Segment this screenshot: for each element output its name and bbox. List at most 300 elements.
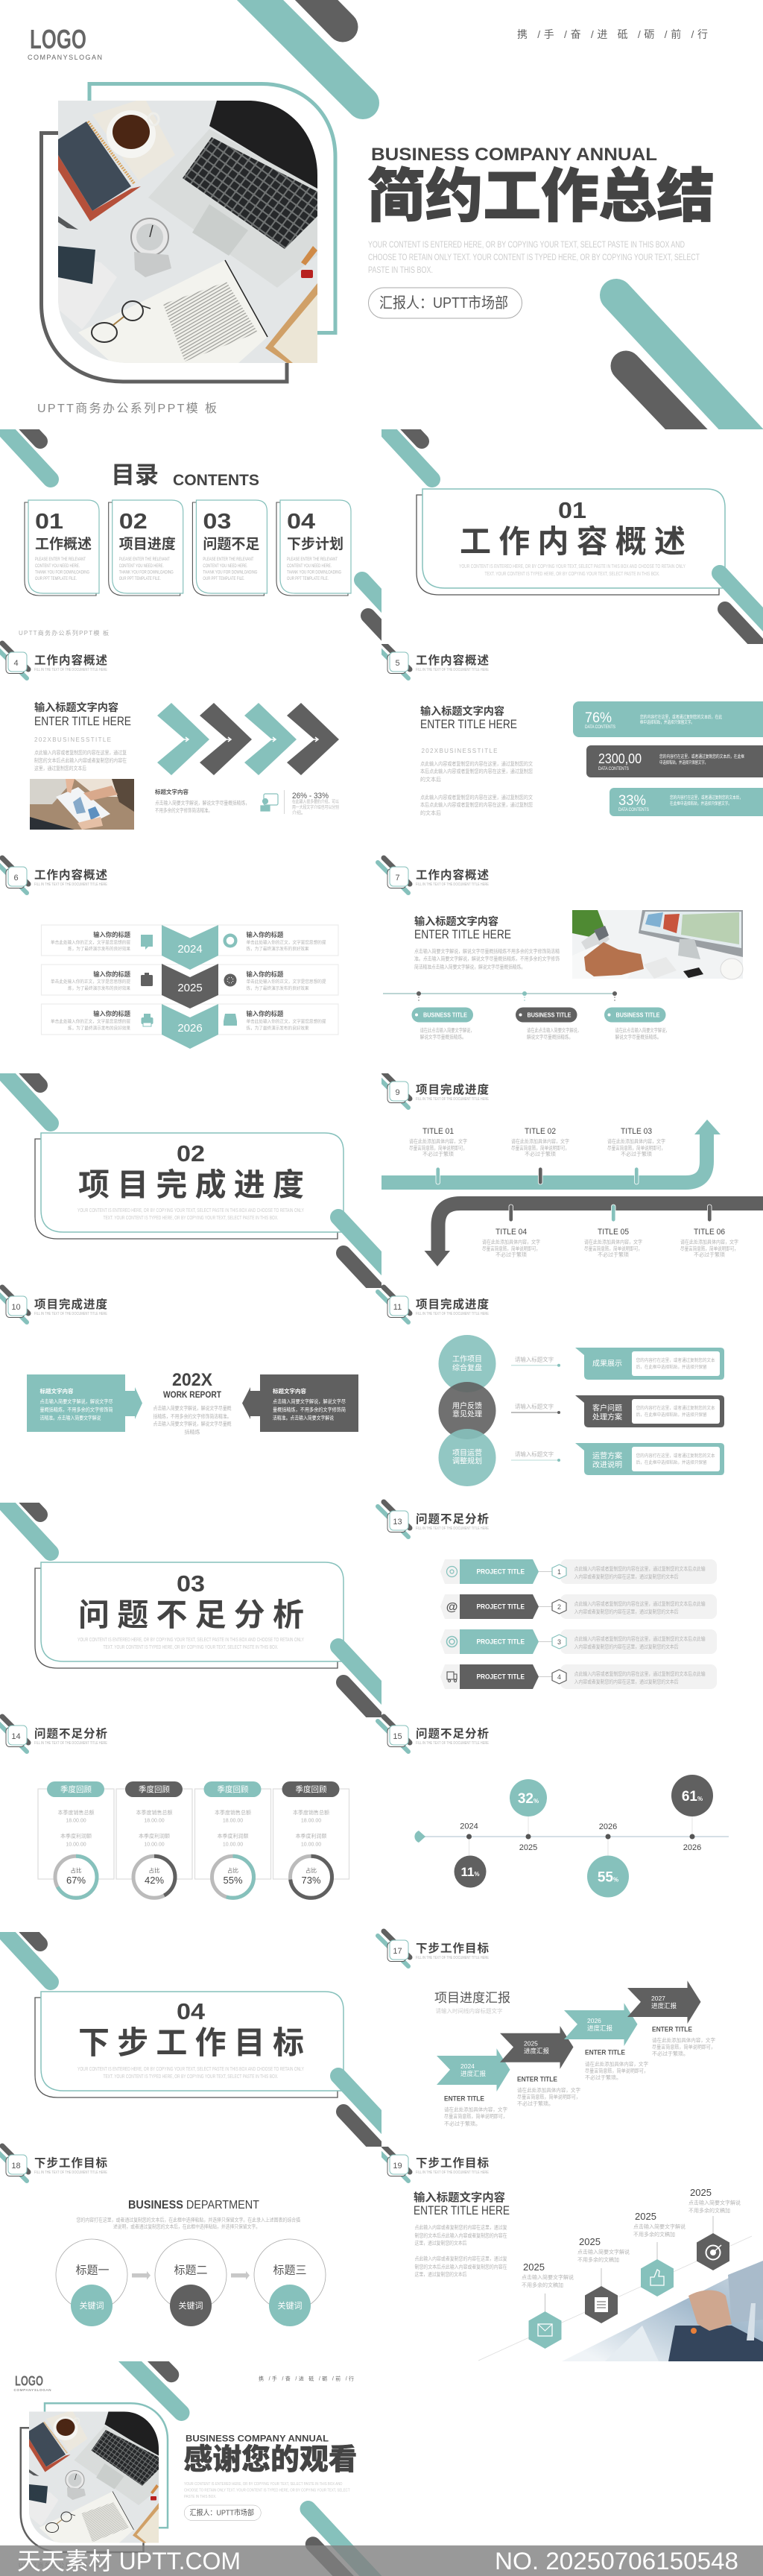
tech photo — [562, 2261, 763, 2361]
data card 76% — [573, 701, 763, 737]
section number: 04 — [177, 1998, 206, 2024]
quarter card 1: 占比 — [70, 1866, 82, 1874]
row text left — [51, 931, 131, 1032]
icon: suitcase — [141, 973, 153, 986]
year labels — [460, 1822, 701, 1852]
contents card 01 — [25, 500, 99, 596]
stair arrow 2025: 尽量言简意赅，简单说明即可， — [517, 2093, 580, 2100]
quarter card 3: 季度回顾 — [218, 1784, 249, 1794]
step 3: 2025 — [635, 2211, 656, 2222]
heading text: 点此输入内容或者复制您的内容在这里，通过复制您的文 — [420, 760, 533, 767]
heading text: 这里，通过复制您的文本后 — [414, 2239, 466, 2247]
band 2026 — [162, 1004, 218, 1049]
slide 9: road arrows — [378, 1073, 763, 1266]
contents card 04 — [276, 500, 351, 596]
slide 10: work report — [0, 1287, 358, 1436]
project row 2: 入内容或者复制您的内容在这里，通过复制您的文本后 — [574, 1609, 679, 1614]
stair arrow 2026: 不必过于繁琐。 — [585, 2074, 621, 2081]
title 04: 请在此处添加具体内容，文字 — [482, 1239, 540, 1245]
row text left: 输入你的标题 — [93, 931, 131, 938]
header title — [416, 1726, 490, 1746]
quarter card 4: 季度回顾 — [295, 1784, 327, 1794]
heading text: 202XBUSINESSTITLE — [34, 736, 111, 743]
slide 15: bubble timeline — [378, 1717, 729, 1898]
project row 3: 3 — [557, 1638, 561, 1646]
header title: FILL IN THE TEXT OF THE DOCUMENT TITLE HERE — [416, 1097, 490, 1102]
section number: 01 — [558, 497, 586, 523]
center report text: 点击输入简要文字解说，解说文字尽量概 — [153, 1421, 231, 1427]
step 2 — [577, 2236, 630, 2323]
project row 3: 点此输入内容或者复制您的内容在这里，通过复制您的文本后点此输 — [574, 1635, 706, 1642]
result card 1: 您的内容打在这里，或者通过复制您的文本 — [636, 1357, 715, 1363]
circle: 标题三 — [254, 2239, 326, 2326]
title 03 — [607, 1127, 665, 1157]
slide 19: hexagon steps — [378, 2146, 763, 2361]
quarter card 3: 本季度利润额 — [218, 1832, 249, 1840]
chevron 1 — [157, 703, 209, 775]
contents card 03: 问题不足 — [203, 536, 259, 552]
pill 2: 请在此点击输入简要文字解说， — [527, 1027, 581, 1033]
stair arrow 2026: ENTER TITLE — [585, 2048, 625, 2057]
circle: 标题一: 关键词 — [79, 2300, 104, 2311]
icon: presenter — [261, 794, 278, 811]
slide 6: year rows — [0, 858, 338, 1049]
contents card 03: 03 — [203, 510, 231, 534]
slide 11: overlapping circles — [378, 1287, 724, 1486]
header title: FILL IN THE TEXT OF THE DOCUMENT TITLE HERE — [416, 883, 490, 887]
step 2: 点击输入简要文字解说 — [577, 2248, 630, 2255]
stair arrow 2024 — [437, 2048, 510, 2127]
left arrow card: 量概括精炼，不用多余的文字修饰简 — [40, 1406, 113, 1413]
circle 1 — [438, 1335, 496, 1392]
project row 4 — [440, 1664, 717, 1689]
center report text: 括精炼，不用多余的文字修饰简洁精准。 — [153, 1413, 231, 1419]
heading text: ENTER TITLE HERE — [420, 718, 517, 731]
year labels: 2026 — [599, 1822, 617, 1831]
header title: 问题不足分析 — [416, 1512, 489, 1526]
circle: 标题一: 标题一 — [75, 2264, 110, 2276]
title 05: 请在此处添加具体内容，文字 — [584, 1239, 642, 1245]
heading text: 本后点此输入内容或者复制您的内容在这里，通过复制您 — [420, 801, 533, 808]
data card 2300,00 — [586, 745, 763, 777]
year labels: 2025 — [519, 1843, 537, 1852]
title 02: 尽量言简意赅，简单说明即可， — [511, 1145, 569, 1151]
result card 3: 后，在此框中选择粘贴，并选择只保留 — [636, 1459, 707, 1465]
header title — [34, 868, 108, 887]
contents card 03 — [192, 500, 267, 596]
page number: 9 — [395, 1088, 400, 1097]
bubble 61% — [671, 1775, 713, 1816]
stair arrow 2027: ENTER TITLE — [652, 2026, 692, 2033]
department heading — [76, 2199, 300, 2230]
quarter card 4: 本季度利润额 — [295, 1832, 326, 1840]
header title: 工作内容概述 — [416, 868, 489, 882]
row text left: 炼，为了最终演示发布的良好效果 — [68, 946, 130, 952]
header title — [34, 653, 108, 672]
chevron 4 — [287, 703, 339, 775]
title 01: 请在此处添加具体内容，文字 — [409, 1137, 467, 1145]
data card 76%: DATA CONTENTS — [585, 725, 615, 730]
header title: 工作内容概述 — [34, 868, 107, 882]
heading text: ENTER TITLE HERE — [34, 715, 131, 728]
step 1: 点击输入简要文字解说 — [522, 2273, 574, 2281]
circle 2: 用户反馈 — [452, 1401, 482, 1410]
right arrow card: 标题文字内容 — [273, 1387, 306, 1395]
circle 1: 工作项目 — [452, 1355, 482, 1364]
row text right: 单击此处输入你的正文，文字是您思想的提 — [246, 1018, 326, 1024]
row text right: 单击此处输入你的正文，文字是您思想的提 — [246, 979, 326, 985]
heading text: 输入标题文字内容 — [34, 701, 118, 713]
row text left: 炼，为了最终演示发布的良好效果 — [68, 985, 130, 991]
circle 2 — [438, 1382, 496, 1439]
data card 33%: 33% — [618, 793, 646, 809]
title 03: 请在此处添加具体内容，文字 — [607, 1137, 665, 1145]
bubble 55% — [587, 1856, 629, 1898]
row text left: 单击此处输入你的正文，文字是您思想的提 — [51, 1018, 130, 1024]
circle 1: 综合复盘 — [452, 1363, 482, 1373]
heading text: 的文本后 — [420, 809, 441, 816]
header title — [416, 1512, 490, 1531]
report heading — [434, 1991, 510, 2014]
page number: 15 — [393, 1732, 402, 1741]
row text right: 输入你的标题 — [246, 1010, 284, 1017]
heading text: 输入标题文字内容 — [414, 2191, 505, 2204]
header title: 下步工作目标 — [416, 1941, 489, 1955]
quarter card 2: 42% — [145, 1875, 164, 1886]
watermark band: NO. 20250706150548 — [495, 2548, 738, 2575]
quarter card 2: 10.00.00 — [144, 1843, 165, 1847]
title 05: 尽量言简意赅，简单说明即可， — [584, 1245, 642, 1252]
header title: 下步工作目标 — [34, 2156, 107, 2170]
section title: 项目完成进度 — [78, 1167, 304, 1202]
project row 3: PROJECT TITLE — [477, 1638, 525, 1646]
step 4 — [688, 2187, 741, 2270]
pill 3: 请在此点击输入简要文字解说， — [615, 1027, 669, 1033]
step 4: 点击输入简要文字解说 — [688, 2199, 741, 2206]
result card 1: 成果展示 — [592, 1360, 622, 1368]
right arrow card: 量概括精炼，不用多余的文字修饰简 — [273, 1406, 346, 1413]
heading text: 点击输入简要文字解说，解说文字尽量概括精炼不用多余的文字修饰简洁精 — [414, 948, 560, 954]
heading text: 这里，通过复制您的文本后 — [414, 2270, 466, 2278]
slide 16: section 04 — [0, 1919, 402, 2159]
title 01: 不必过于繁琐 — [422, 1151, 454, 1157]
step 4: 不用多余的文稿加 — [688, 2207, 730, 2214]
step 4: 2025 — [690, 2187, 712, 2198]
page number: 7 — [395, 874, 400, 883]
stair arrow 2027 — [627, 1980, 715, 2057]
connectors: 请输入标题文字 — [515, 1450, 554, 1458]
data card 76%: 框中选择粘贴，并选择只保留文字。 — [640, 719, 694, 725]
page number: 13 — [393, 1518, 402, 1527]
header title — [416, 1941, 490, 1960]
stair arrow 2024: 不必过于繁琐。 — [444, 2120, 481, 2127]
band 2025 — [162, 964, 218, 1008]
contents card 01: 01 — [35, 510, 63, 534]
pill 1: 解说文字尽量概括精炼。 — [420, 1033, 466, 1041]
title 02: 不必过于繁琐 — [525, 1151, 556, 1157]
quarter card 1: 18.00.00 — [66, 1819, 86, 1823]
row text left: 炼，为了最终演示发布的良好效果 — [68, 1026, 130, 1032]
icon: inbox — [224, 1014, 237, 1026]
title 05: 不必过于繁琐 — [598, 1251, 629, 1258]
quarter card 3: 占比 — [227, 1866, 238, 1874]
step 2: 2025 — [579, 2236, 601, 2247]
quarter card 1: 本季度利润额 — [60, 1832, 92, 1840]
stair arrow 2026: 2026 — [587, 2017, 601, 2024]
row text left: 输入你的标题 — [93, 970, 131, 978]
pill 1 — [411, 1008, 475, 1041]
stair arrow 2025: ENTER TITLE — [517, 2075, 557, 2084]
contents heading: 目录 — [111, 461, 159, 488]
stat text: 介绍。 — [292, 809, 305, 815]
slide 7: photo and timeline — [378, 858, 743, 1041]
title 06: 不必过于繁琐 — [694, 1251, 725, 1258]
quarter card 4: 10.00.00 — [301, 1843, 321, 1847]
center report text — [153, 1370, 231, 1436]
section title: 问题不足分析 — [78, 1597, 304, 1632]
caption text — [155, 788, 250, 814]
heading text: ENTER TITLE HERE — [414, 2204, 510, 2217]
section number: 02 — [177, 1140, 205, 1167]
page number: 11 — [393, 1303, 402, 1312]
page number: 14 — [11, 1732, 21, 1741]
bubble 55%: 55% — [598, 1869, 618, 1886]
row text right: 炼，为了最终演示发布的良好效果 — [246, 1026, 308, 1032]
department heading: 您的内容打在这里，或者通过复制您的文本后，在此框中选择粘贴，并选择只保留文字。在此录入上述图表的综合描 — [76, 2217, 300, 2223]
stair arrow 2024: 尽量言简意赅，简单说明即可， — [444, 2112, 507, 2120]
slide 13: project rows — [378, 1502, 717, 1689]
bubble 32%: 32% — [518, 1791, 539, 1807]
title 01 — [409, 1127, 467, 1157]
band 2024 — [162, 925, 218, 970]
slide 8: section 02 — [0, 1061, 402, 1300]
title 05 — [584, 1228, 642, 1258]
icon: gear — [224, 974, 236, 986]
pill 2: BUSINESS TITLE — [528, 1012, 572, 1018]
header title: 工作内容概述 — [416, 653, 489, 667]
section title: 下步工作目标 — [78, 2025, 304, 2060]
header title — [34, 1726, 108, 1746]
heading text: 点此输入内容或者复制您的内容在这里，通过复 — [414, 2224, 507, 2230]
row text left: 输入你的标题 — [93, 1010, 131, 1017]
result card 3: 运营方案 — [592, 1450, 622, 1461]
title 03: 不必过于繁琐 — [621, 1151, 652, 1157]
project row 4: PROJECT TITLE — [477, 1673, 525, 1680]
center report text: 括精炼 — [185, 1428, 200, 1436]
stair arrow 2025: 不必过于繁琐。 — [517, 2100, 554, 2106]
row text left: 单击此处输入你的正文，文字是您思想的提 — [51, 939, 130, 945]
slide 14: quarterly cards — [0, 1717, 349, 1898]
header title: FILL IN THE TEXT OF THE DOCUMENT TITLE HERE — [416, 1312, 490, 1316]
project row 2 — [440, 1594, 717, 1619]
timeline — [383, 991, 617, 1003]
stair arrow 2025 — [500, 2026, 580, 2106]
heading text: 制您的文本后点此输入内容或者复制您的内容在 — [414, 2232, 507, 2239]
result card 2: 客户问题 — [592, 1403, 622, 1413]
project row 1: 1 — [557, 1568, 561, 1576]
year labels: 2026 — [683, 1843, 701, 1852]
circle: 标题一 — [56, 2239, 127, 2326]
contents card 04: 04 — [287, 510, 315, 534]
center report text: 点击输入简要文字解说，解说文字尽量概 — [153, 1404, 231, 1412]
quarter card 2: 本季度利润额 — [139, 1832, 170, 1840]
step 3 — [633, 2211, 686, 2296]
caption text: 不用多余的文字修饰简洁精准。 — [155, 806, 212, 814]
slide 2: contents — [0, 429, 382, 641]
pill 3: 解说文字尽量概括精炼。 — [615, 1033, 662, 1041]
arrow 2 — [231, 2271, 250, 2279]
result card 2: 您的内容打在这里，或者通过复制您的文本 — [636, 1405, 715, 1411]
stair arrow 2025: 进度汇报 — [524, 2048, 550, 2055]
page number: 17 — [393, 1947, 402, 1956]
teal road arrow — [382, 1120, 721, 1182]
heading text: 点此输入内容或者复制您的内容在这里，通过复制您的文 — [420, 794, 533, 801]
step 2: 不用多余的文稿加 — [577, 2256, 619, 2263]
row text right: 输入你的标题 — [246, 970, 284, 978]
office photo — [572, 910, 743, 979]
pill 3: BUSINESS TITLE — [615, 1012, 660, 1018]
slide 1: cover — [28, 0, 763, 458]
contents card 01: 工作概述 — [35, 536, 92, 552]
quarter card 1: 67% — [66, 1875, 86, 1886]
quarter card 3 — [195, 1781, 271, 1898]
quarter card 2 — [116, 1781, 192, 1898]
header title: FILL IN THE TEXT OF THE DOCUMENT TITLE HERE — [416, 1741, 490, 1746]
header title — [34, 1297, 108, 1316]
title 02 — [511, 1127, 569, 1157]
quarter card 3: 本季度销售总额 — [215, 1809, 251, 1816]
title 06: 尽量言简意赅，简单说明即可， — [680, 1245, 738, 1252]
stat text: 在此输入很多要的介绍，可以 — [292, 799, 339, 805]
header title: FILL IN THE TEXT OF THE DOCUMENT TITLE HERE — [416, 668, 490, 672]
project row 2: 2 — [557, 1603, 561, 1611]
header title: FILL IN THE TEXT OF THE DOCUMENT TITLE HERE — [34, 1312, 108, 1316]
project row 3: 入内容或者复制您的内容在这里，通过复制您的文本后 — [574, 1643, 679, 1650]
quarter card 2: 18.00.00 — [144, 1819, 165, 1823]
circle 2: 意见处理 — [452, 1409, 482, 1419]
icon: lifebuoy — [224, 934, 237, 947]
header title: FILL IN THE TEXT OF THE DOCUMENT TITLE HERE — [34, 668, 108, 672]
caption text: 点击输入简要文字解说，解说文字尽量概括精炼， — [155, 799, 250, 806]
heading text: 点此输入内容或者复制您的内容在这里，通过复 — [34, 749, 127, 756]
quarter card 4 — [273, 1781, 349, 1898]
data card 76%: 76% — [585, 710, 612, 726]
section number: 03 — [177, 1570, 205, 1597]
slide 5: data cards — [378, 643, 763, 816]
contents card 04: 下步计划 — [287, 536, 343, 552]
band 2025: 2025 — [177, 982, 203, 994]
data card 2300,00: 2300,00 — [598, 751, 642, 766]
stat text: 用一大段文字介绍也可以分别 — [292, 804, 339, 810]
quarter card 1 — [38, 1781, 114, 1898]
stair arrow 2024: 2024 — [460, 2062, 475, 2070]
result card 3: 您的内容打在这里，或者通过复制您的文本 — [636, 1453, 715, 1459]
title 04: 不必过于繁琐 — [496, 1251, 527, 1258]
stair arrow 2026: 请在此处添加具体内容，文字 — [585, 2060, 648, 2068]
section title: 工作内容概述 — [460, 524, 686, 559]
right arrow card — [242, 1374, 358, 1432]
slide 18: business department — [0, 2146, 326, 2326]
header title: 项目完成进度 — [416, 1082, 489, 1096]
heading text: 准。点击输入简要文字解说，解说文字尽量概括精炼，不用多余的文字修饰 — [414, 956, 560, 962]
title 03: 尽量言简意赅，简单说明即可， — [607, 1145, 665, 1151]
slide 4: chevrons — [0, 643, 339, 830]
heading text: 简洁精准点击输入简要文字解说，解说文字尽量概括精炼。 — [414, 963, 525, 970]
pill 1: BUSINESS TITLE — [423, 1012, 468, 1018]
quarter card 2: 本季度销售总额 — [136, 1809, 173, 1816]
row boxes — [42, 925, 338, 1035]
step 3: 不用多余的文稿加 — [633, 2231, 675, 2238]
quarter card 3: 18.00.00 — [223, 1819, 243, 1823]
project row 2: @ — [446, 1601, 458, 1614]
title 06: 请在此处添加具体内容，文字 — [680, 1239, 738, 1245]
chevron 3 — [244, 703, 297, 775]
row text right: 单击此处输入你的正文，文字是您思想的提 — [246, 939, 326, 945]
connectors — [511, 1355, 560, 1462]
stair arrow 2027: 2027 — [651, 1995, 665, 2002]
header title — [416, 868, 490, 887]
step 1: 2025 — [523, 2261, 545, 2273]
data card 33% — [610, 788, 763, 816]
page number: 18 — [11, 2162, 21, 2171]
pill 3 — [604, 1008, 669, 1041]
quarter card 4: 18.00.00 — [301, 1819, 321, 1823]
title 04 — [482, 1228, 540, 1258]
header title: 问题不足分析 — [34, 1726, 107, 1740]
quarter card 2: 季度回顾 — [139, 1784, 170, 1794]
heading text — [34, 701, 131, 771]
heading text: 的文本后 — [420, 776, 441, 783]
heading text: 输入标题文字内容 — [420, 705, 504, 717]
stair arrow 2024: 请在此处添加具体内容，文字 — [444, 2106, 507, 2112]
watermark band: 天天素材 UPTT.COM — [17, 2548, 241, 2575]
icon: printer — [142, 1014, 153, 1026]
contents card 02 — [109, 500, 183, 596]
band 2024: 2024 — [177, 943, 203, 956]
data card 76%: 您的内容打在这里，或者通过复制您的文本后，在此 — [640, 714, 722, 720]
stair arrow 2026: 尽量言简意赅，简单说明即可， — [585, 2068, 648, 2074]
circle 3: 项目运营 — [452, 1448, 482, 1458]
stair arrow 2024: ENTER TITLE — [444, 2094, 484, 2103]
slide 20: thank you cover — [13, 2343, 384, 2576]
stair arrow 2027: 尽量言简意赅，简单说明即可， — [652, 2044, 715, 2050]
year labels: 2024 — [460, 1822, 478, 1831]
left arrow card — [27, 1374, 142, 1432]
quarter card 4: 73% — [301, 1875, 321, 1886]
connectors: 请输入标题文字 — [515, 1403, 554, 1410]
quarter card 1: 本季度销售总额 — [58, 1809, 94, 1816]
stair arrow 2027: 请在此处添加具体内容，文字 — [652, 2036, 715, 2044]
data card 2300,00: DATA CONTENTS — [598, 767, 629, 771]
title 06: TITLE 06 — [694, 1228, 725, 1237]
icon: chat — [141, 935, 153, 950]
department heading: BUSINESS DEPARTMENT — [128, 2199, 259, 2212]
contents card 02: 项目进度 — [119, 535, 176, 552]
page number: 6 — [13, 874, 19, 883]
heading text: 制您的文本后点此输入内容或者复制您的内容在 — [34, 757, 127, 763]
contents card 02: 02 — [119, 510, 148, 534]
timeline axis — [414, 1814, 729, 1859]
contents heading — [115, 464, 259, 486]
quarter card 1: 10.00.00 — [66, 1843, 86, 1847]
result card 1 — [575, 1348, 724, 1380]
heading text — [414, 915, 560, 970]
title 05: TITLE 05 — [598, 1228, 629, 1237]
step 1: 不用多余的文稿加 — [522, 2282, 563, 2288]
circle: 标题二: 关键词 — [179, 2300, 203, 2311]
heading text: 这里，通过复制您的文本后 — [34, 765, 86, 771]
result card 2: 后，在此框中选择粘贴，并选择只保留 — [636, 1412, 707, 1418]
